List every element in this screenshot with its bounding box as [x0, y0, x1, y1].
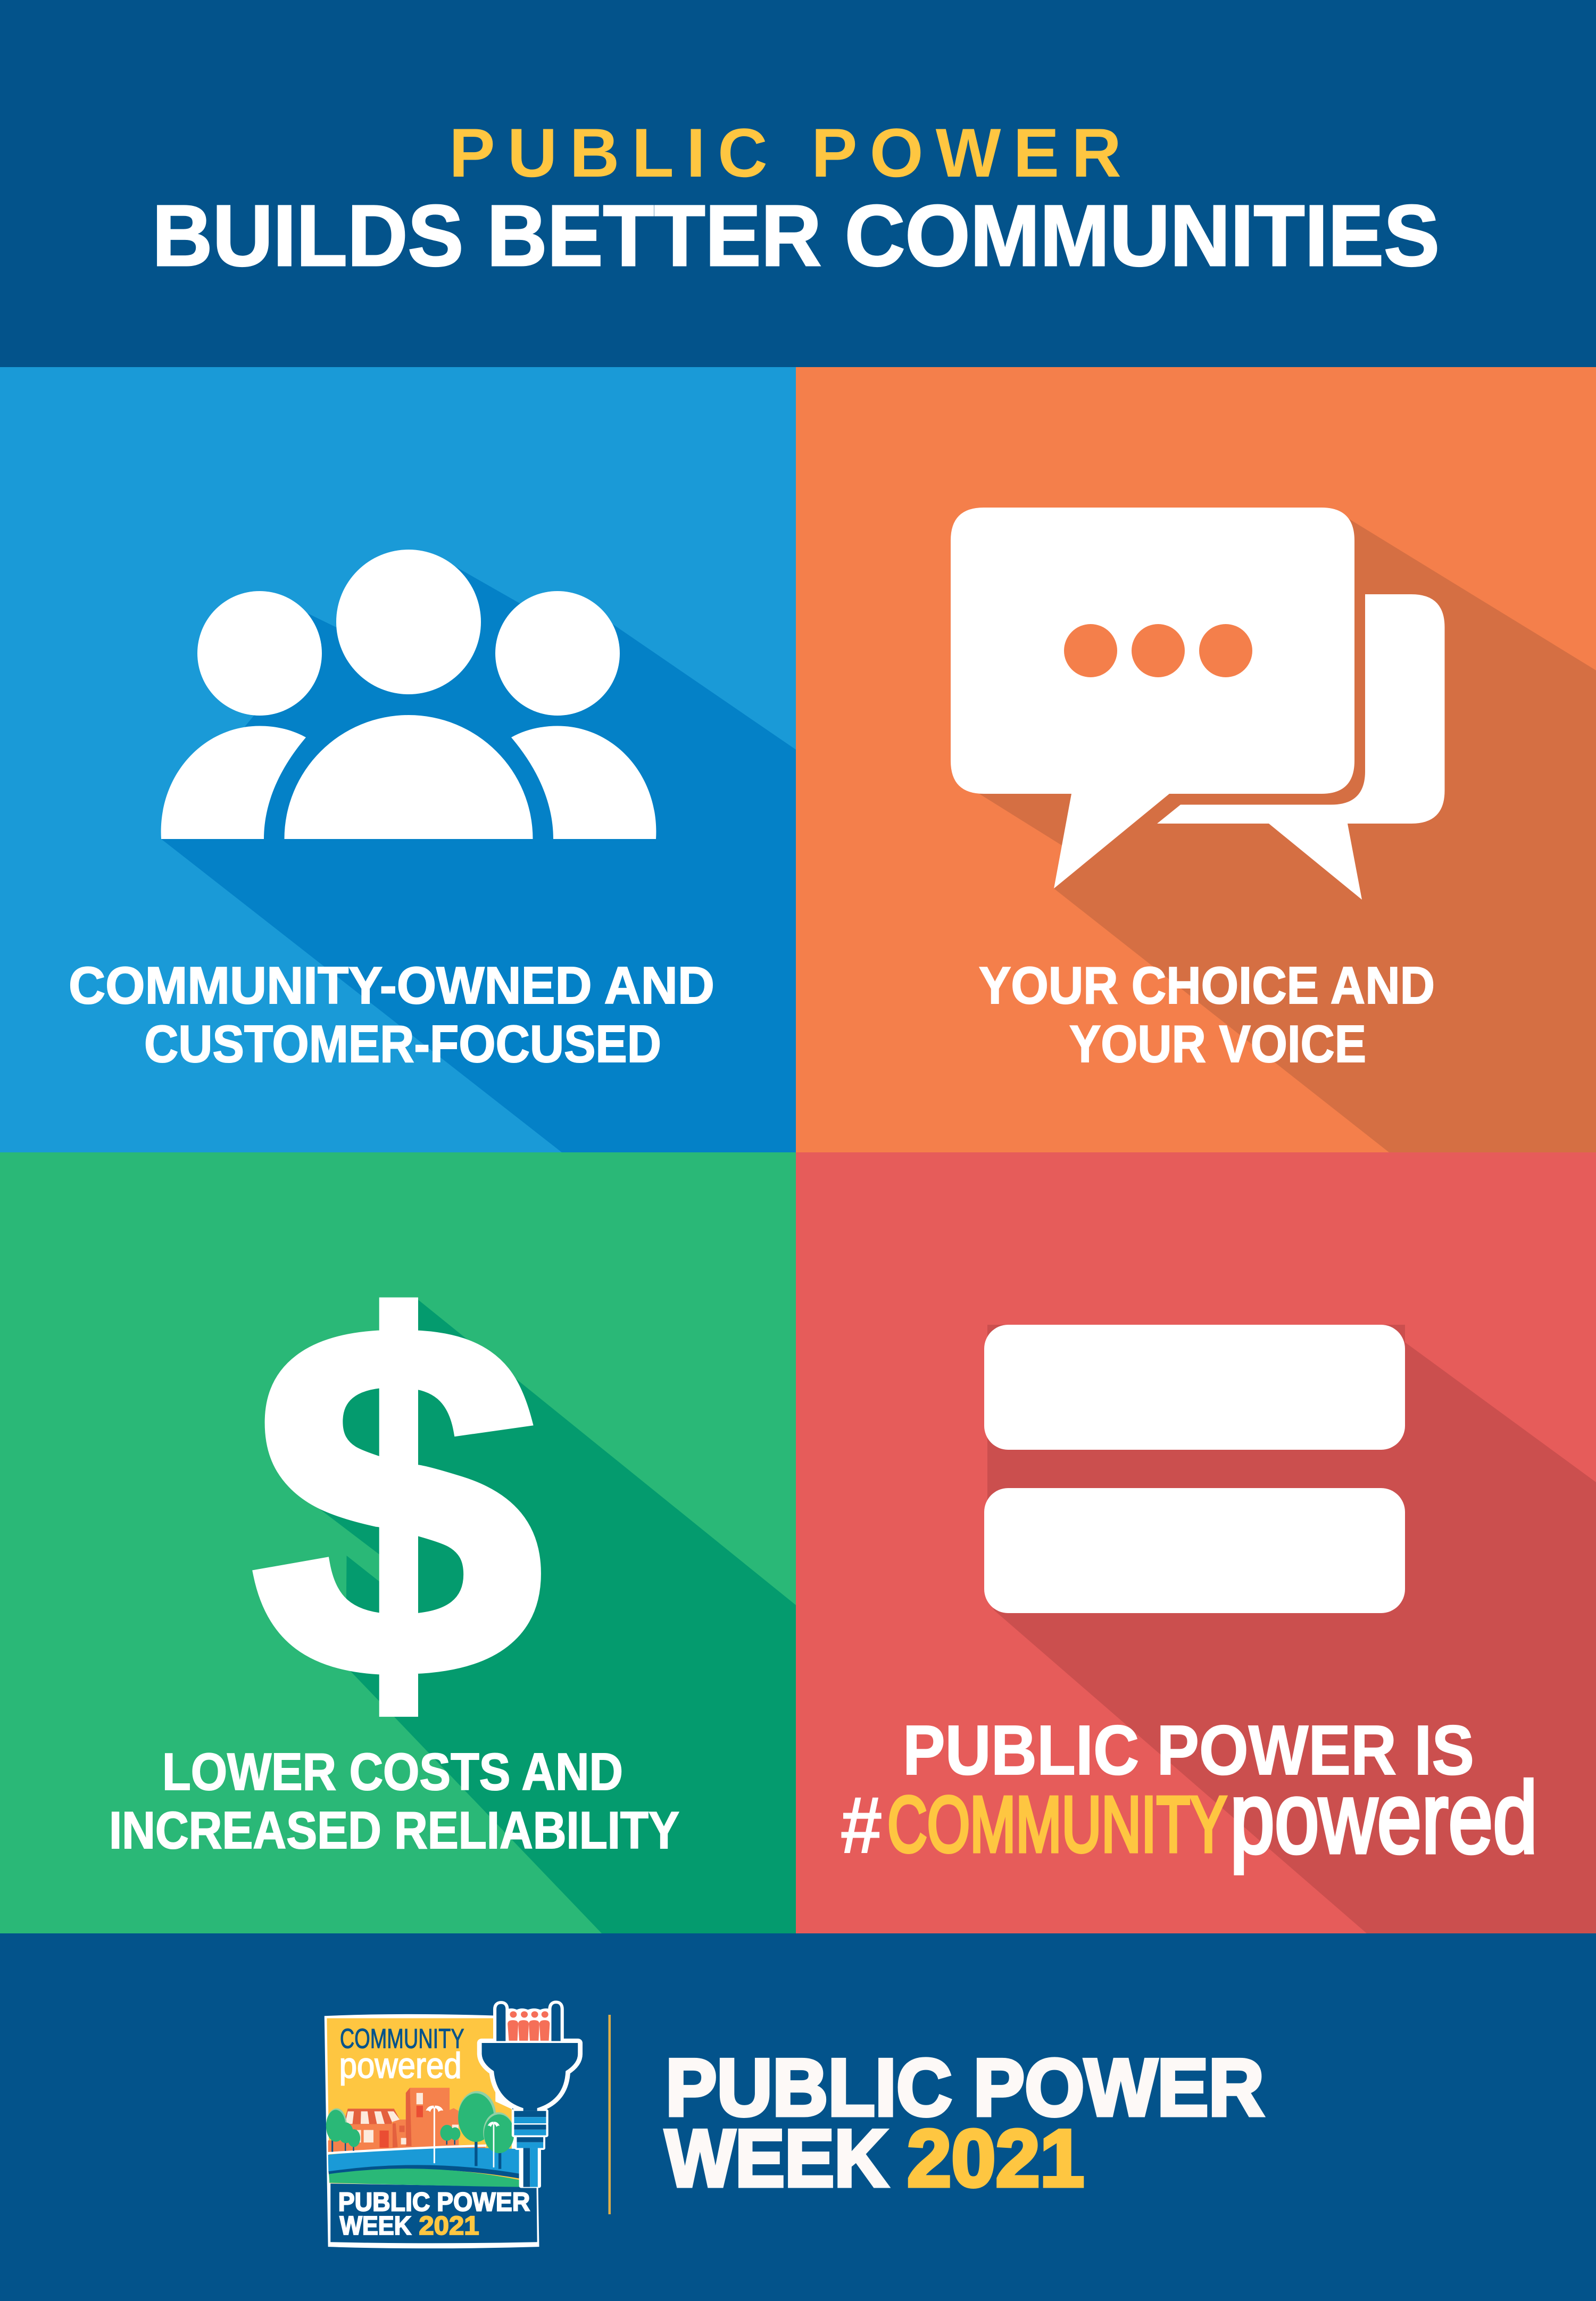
label: lower costs and increased reliability: INCREASED RELIABILITY — [109, 1801, 679, 1859]
label: public power is community powered: # — [840, 1780, 883, 1871]
long shadow: dollar sign — [287, 1298, 796, 1933]
panel: your choice — [796, 367, 1596, 1152]
label: your choice and your voice: YOUR VOICE — [1069, 1015, 1366, 1073]
logo: wordmark: 2021 — [419, 2211, 479, 2240]
logo: trees — [326, 2091, 514, 2169]
footer title: public power week 2021: PUBLIC POWER — [666, 2042, 1264, 2133]
logo: street lamps — [426, 2106, 500, 2167]
panel: lower costs — [0, 1152, 796, 1933]
logo: wordmark: WEEK — [339, 2211, 411, 2240]
logo: community powered public power week — [325, 2004, 578, 2248]
icon: dollar sign: $ — [252, 1221, 543, 1780]
label: community-owned and customer-focused — [69, 956, 714, 1073]
logo: wordmark: PUBLIC POWER — [338, 2187, 530, 2216]
label: community-owned and customer-focused: COMMUNITY-OWNED AND — [69, 956, 714, 1015]
logo: wordmark — [338, 2023, 530, 2240]
heading: public power: PUBLIC POWER — [449, 114, 1121, 192]
long shadow: equals bars — [987, 1325, 1596, 1933]
label: your choice and your voice: YOUR CHOICE AND — [979, 956, 1435, 1015]
logo: plug — [482, 2004, 578, 2187]
label: public power is community powered: PUBLIC POWER IS — [903, 1711, 1474, 1789]
logo: road and hill — [328, 2146, 519, 2187]
label: community-owned and customer-focused: CUSTOMER-FOCUSED — [144, 1015, 661, 1073]
logo: wordmark: powered — [339, 2045, 462, 2086]
panel: header — [0, 0, 1596, 367]
logo: town buildings — [328, 2088, 485, 2153]
footer title: public power week 2021: WEEK — [665, 2113, 888, 2204]
label: lower costs and increased reliability: LOWER COSTS AND — [162, 1742, 623, 1801]
footer title: public power week 2021: 2021 — [907, 2113, 1084, 2204]
icon: three people — [161, 550, 656, 839]
panel: community-owned — [0, 367, 796, 1152]
icon: speech bubbles — [951, 508, 1445, 900]
label: your choice and your voice — [979, 956, 1435, 1073]
long shadow: speech bubbles — [979, 516, 1596, 1152]
panel: footer — [0, 1933, 1596, 2301]
logo: wordmark: COMMUNITY — [340, 2023, 464, 2054]
label: public power is community powered: COMMUNITY — [887, 1781, 1227, 1868]
icon: equals bars — [984, 1325, 1405, 1613]
heading: builds better communities: BUILDS BETTER COMMUNITIES — [152, 187, 1440, 284]
label: lower costs and increased reliability — [109, 1742, 679, 1859]
footer title: public power week 2021 — [665, 2042, 1264, 2204]
long shadow: people — [161, 567, 796, 1152]
label: public power is community powered — [840, 1711, 1537, 1874]
panel: community powered — [796, 1152, 1596, 1933]
